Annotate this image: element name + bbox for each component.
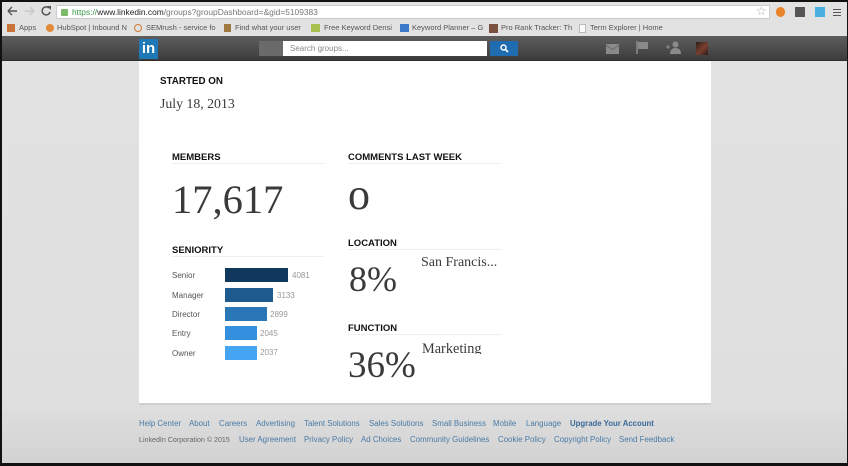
footer links row 1: Careers — [219, 419, 247, 428]
bookmarks bar: Apps — [19, 23, 36, 32]
icon: add connection — [666, 42, 681, 54]
bookmarks bar — [7, 23, 663, 33]
comments heading: COMMENTS LAST WEEK — [348, 152, 462, 163]
bookmarks bar: Pro Rank Tracker: Th — [501, 23, 572, 32]
search box: Search groups... — [290, 44, 349, 53]
bar chart: seniority: Entry — [172, 329, 191, 338]
icon: profile photo — [696, 42, 708, 55]
linkedin logo — [139, 39, 158, 59]
bookmarks bar: Term Explorer | Home — [590, 23, 663, 32]
function percentage: 36% — [348, 345, 416, 386]
bar chart: seniority: 3133 — [277, 291, 295, 300]
icon: magnifier — [500, 44, 508, 53]
bar chart: seniority: Director — [172, 310, 200, 319]
footer links row 2: User Agreement — [239, 435, 296, 444]
seniority heading: SENIORITY — [172, 245, 223, 256]
extension icons — [756, 4, 841, 18]
footer links row 1: Upgrade Your Account — [570, 419, 654, 428]
footer links row 1: Talent Solutions — [304, 419, 360, 428]
footer links row 2: Copyright Policy — [554, 435, 611, 444]
extension icons: ☆ — [756, 4, 767, 18]
icon: secure lock — [61, 9, 68, 16]
search box — [283, 41, 487, 56]
location name: San Francis... — [421, 255, 497, 270]
footer links row 2: Privacy Policy — [304, 435, 353, 444]
panel: function — [348, 323, 501, 386]
panel bottom edge — [139, 403, 711, 405]
footer links row 1 — [139, 419, 654, 428]
url text: https://www.linkedin.com/groups?groupDashboard=&gid=5109383 — [72, 7, 318, 17]
footer links row 1: Sales Solutions — [369, 419, 423, 428]
bar chart: seniority: Manager — [172, 291, 204, 300]
footer links row 1: Help Center — [139, 419, 181, 428]
search button — [490, 41, 518, 56]
bar chart: seniority: 4081 — [292, 271, 310, 280]
white content panel — [139, 61, 711, 403]
bar chart: seniority: 2037 — [260, 348, 278, 357]
panel: location — [348, 238, 501, 299]
bar chart: seniority: Senior — [172, 271, 195, 280]
bookmarks bar: Free Keyword Densi — [324, 23, 392, 32]
comments value: o — [348, 170, 370, 219]
footer links row 2: Community Guidelines — [410, 435, 489, 444]
footer links row 1: Advertising — [256, 419, 295, 428]
bar chart: seniority: Owner — [172, 349, 196, 358]
footer links row 2 — [139, 435, 674, 444]
icon: flag — [636, 41, 648, 54]
bookmark icons — [7, 24, 586, 33]
browser chrome — [0, 0, 848, 36]
footer links row 2: Ad Choices — [361, 435, 401, 444]
footer links row 2: LinkedIn Corporation © 2015 — [139, 436, 230, 444]
panel: comments last week — [348, 152, 501, 219]
started on date: July 18, 2013 — [160, 96, 235, 111]
footer links row 1: Language — [526, 419, 561, 428]
bookmarks bar: HubSpot | Inbound N — [57, 23, 127, 32]
footer links row 1: About — [189, 419, 210, 428]
footer links row 2: Send Feedback — [619, 435, 674, 444]
bookmarks bar: Keyword Planner – G — [412, 23, 483, 32]
footer links row 2: Cookie Policy — [498, 435, 546, 444]
location heading: LOCATION — [348, 238, 397, 249]
top navigation bar — [0, 36, 848, 61]
members heading: MEMBERS — [172, 152, 221, 163]
linkedin logo: in — [142, 40, 155, 57]
function heading: FUNCTION — [348, 323, 397, 334]
search category button — [259, 41, 283, 56]
footer links row 1: Small Business — [432, 419, 486, 428]
bar chart: seniority: 2899 — [270, 310, 288, 319]
started on heading: STARTED ON — [160, 76, 223, 87]
icon: messages — [606, 44, 619, 54]
address bar — [56, 5, 770, 19]
panel: members — [172, 152, 325, 222]
bookmarks bar: SEMrush - service fo — [146, 23, 216, 32]
footer links row 1: Mobile — [493, 419, 516, 428]
navigation buttons — [8, 6, 51, 16]
bar chart: seniority — [172, 268, 310, 360]
location percentage: 8% — [349, 259, 397, 299]
bookmarks bar: Find what your user — [235, 23, 301, 32]
members value: 17,617 — [172, 177, 283, 222]
bar chart: seniority: 2045 — [260, 329, 278, 338]
